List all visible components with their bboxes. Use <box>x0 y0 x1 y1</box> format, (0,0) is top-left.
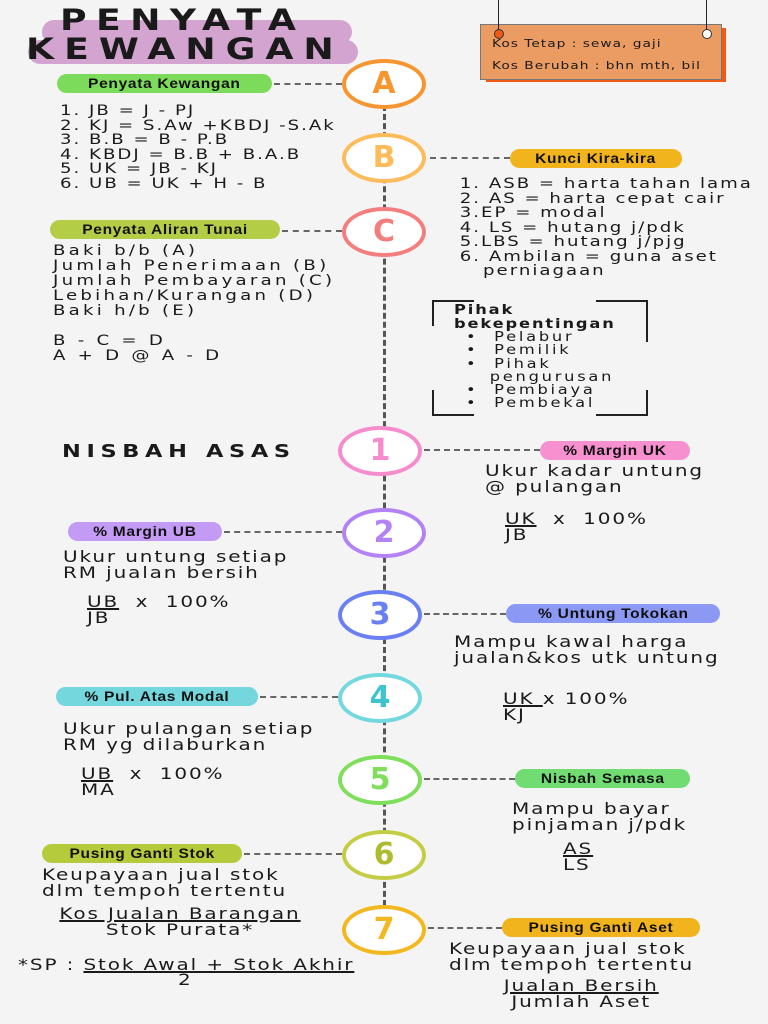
pill: Pusing Ganti Stok: Pusing Ganti Stok <box>69 846 215 861</box>
circle 3 <box>338 590 422 640</box>
formula UB/JB: UB x 100% JB <box>87 592 230 627</box>
circle 5 <box>338 755 422 805</box>
text: pusing ganti aset: Keupayaan jual stok dlm tempoh tertentu <box>449 939 694 974</box>
text: pulangan atas modal: Ukur pulangan setiap RM yg dilaburkan <box>63 719 314 754</box>
pill: Penyata Aliran Tunai <box>50 220 280 239</box>
circle B: B <box>373 140 395 175</box>
formula UK/KJ: UK x 100% KJ <box>503 689 629 724</box>
formula aset: Jualan Bersih Jumlah Aset <box>504 976 659 1011</box>
text: untung tokokan: Mampu kawal harga jualan&kos utk untung <box>454 632 720 667</box>
circle 5: 5 <box>370 762 390 797</box>
circle 2 <box>342 508 426 558</box>
box: pihak berkepentingan: • Pelabur • Pemilik • Pihak pengurusan • Pembiaya • Pembekal <box>466 330 614 411</box>
title <box>26 3 358 66</box>
sign: kos <box>480 0 726 82</box>
vertical timeline <box>383 105 386 915</box>
pill: Nisbah Semasa: Nisbah Semasa <box>541 771 664 786</box>
circle A: A <box>372 66 396 101</box>
pill: Pusing Ganti Aset: Pusing Ganti Aset <box>529 920 673 935</box>
pill: % Pul. Atas Modal: % Pul. Atas Modal <box>85 689 229 704</box>
pill: Penyata Kewangan: Penyata Kewangan <box>88 76 241 91</box>
list: kunci kira-kira: 1. ASB = harta tahan lama 2. AS = harta cepat cair 3.EP = modal 4. LS = hutang j/pdk 5.LBS = hutang j/pjg 6. Ambilan = guna aset perniagaan <box>452 176 753 279</box>
formula UK/JB: UK x 100% JB <box>505 509 648 544</box>
list: penyata kewangan: 1. JB = J - PJ 2. KJ = S.Aw +KBDJ -S.Ak 3. B.B = B - P.B 4. KBDJ = B.B + B.A.B 5. UK = JB - KJ 6. UB = UK + H - B <box>60 103 336 192</box>
formula stok: Kos Jualan Barangan Stok Purata* <box>59 904 301 939</box>
box: pihak berkepentingan: Pihak bekepentingan <box>454 303 616 332</box>
footnote: stok purata: *SP : Stok Awal + Stok Akhir <box>18 955 354 974</box>
pill: % Untung Tokokan <box>506 604 720 623</box>
pill: Penyata Kewangan <box>57 74 272 93</box>
title: PENYATA <box>60 3 305 37</box>
text: pusing ganti stok: Keupayaan jual stok dlm tempoh tertentu <box>42 865 287 900</box>
pill: % Margin UK <box>540 441 690 460</box>
title: KEWANGAN <box>26 32 344 66</box>
text: aliran tunai: Baki b/b (A) Jumlah Penerimaan (B) Jumlah Pembayaran (C) Lebihan/Kurangan (D) Baki h/b (E) B - C = D A + D @ A - D <box>53 243 335 364</box>
pill: Nisbah Semasa <box>515 769 690 788</box>
circle A <box>342 59 426 109</box>
sign: kos: Kos Tetap : sewa, gaji <box>492 37 662 50</box>
pill: Penyata Aliran Tunai: Penyata Aliran Tunai <box>82 222 248 237</box>
text: margin UB: Ukur untung setiap RM jualan bersih <box>63 547 288 582</box>
text: nisbah semasa: Mampu bayar pinjaman j/pdk <box>512 799 687 834</box>
pill: Kunci Kira-kira <box>510 149 682 168</box>
circle C <box>342 207 426 257</box>
pill: % Pul. Atas Modal <box>56 687 258 706</box>
formula AS/LS: AS LS <box>563 839 593 874</box>
pill: Kunci Kira-kira: Kunci Kira-kira <box>536 151 656 166</box>
heading: nisbah asas: NISBAH ASAS <box>62 441 296 462</box>
pill: % Margin UB <box>68 522 222 541</box>
circle C: C <box>373 214 395 249</box>
circle 7: 7 <box>374 912 394 947</box>
pill: % Untung Tokokan: % Untung Tokokan <box>538 606 688 621</box>
circle 7 <box>342 905 426 955</box>
circle 4: 4 <box>370 680 390 715</box>
pill: % Margin UB: % Margin UB <box>93 524 197 539</box>
box: pihak berkepentingan <box>432 300 648 416</box>
circle 1 <box>338 426 422 476</box>
circle 6 <box>342 830 426 880</box>
pill: Pusing Ganti Aset <box>502 918 700 937</box>
text: margin UK: Ukur kadar untung @ pulangan <box>485 461 704 496</box>
circle 1: 1 <box>370 433 390 468</box>
formula UB/MA: UB x 100% MA <box>81 764 224 799</box>
text: 2 <box>178 970 193 989</box>
circle B <box>342 133 426 183</box>
pill: Pusing Ganti Stok <box>42 844 242 863</box>
circle 3: 3 <box>370 597 390 632</box>
circle 6: 6 <box>374 837 394 872</box>
pill: % Margin UK: % Margin UK <box>563 443 667 458</box>
circle 2: 2 <box>374 515 394 550</box>
sign: kos: Kos Berubah : bhn mth, bil <box>492 59 701 72</box>
circle 4 <box>338 673 422 723</box>
